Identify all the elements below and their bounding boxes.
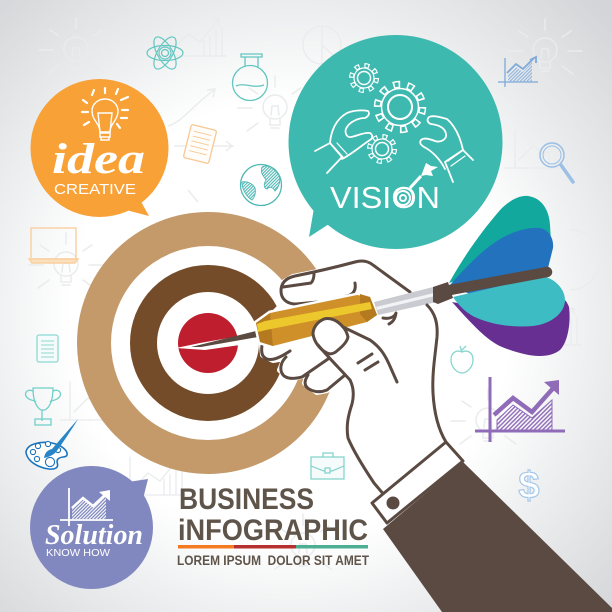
icon: blue chart [498, 57, 538, 87]
icon: palette and brush [26, 419, 78, 469]
cyan flight [453, 276, 565, 327]
icon: atom [147, 34, 183, 72]
blue flight [450, 228, 553, 303]
icon: right hand [420, 116, 473, 182]
icon: trophy [26, 388, 60, 425]
title line 2: iNFOGRAPHIC [178, 514, 368, 547]
target [94, 229, 322, 457]
icon: magnifier [540, 143, 573, 182]
icon: briefcase [311, 453, 344, 479]
subtitle: LOREM IPSUM DOLOR SIT AMET [177, 553, 370, 568]
grip halo [256, 295, 377, 346]
panel: idea bubble [30, 79, 168, 217]
shaft highlight [376, 293, 435, 310]
palm outline [347, 380, 385, 496]
outer ring [94, 229, 322, 457]
thumb [313, 318, 348, 354]
icon: gears [352, 66, 422, 162]
cuff button [386, 496, 400, 510]
icon: light bulb [82, 88, 128, 140]
ring finger [281, 357, 328, 378]
thumb lower edge [343, 327, 397, 382]
tricolour rule [178, 545, 368, 548]
icon: purple chart [475, 377, 565, 442]
shaft [374, 287, 437, 315]
hand back fingers [262, 261, 410, 392]
icon: vision target and dart [396, 163, 438, 205]
dart flights [449, 196, 570, 356]
knuckle lines [358, 354, 378, 370]
jacket sleeve [383, 462, 612, 612]
icon: apple [451, 346, 473, 373]
grip facets [256, 294, 377, 346]
crease behind grip [383, 313, 396, 324]
creative label: CREATIVE [54, 181, 136, 198]
know how label: KNOW HOW [46, 548, 111, 559]
slit in bullseye [176, 336, 240, 350]
icon: document [183, 124, 217, 164]
idea bubble shape [30, 79, 168, 217]
needle [191, 331, 258, 347]
little finger [305, 375, 345, 392]
hand front [313, 305, 446, 496]
grip [256, 295, 377, 346]
index finger [281, 261, 410, 304]
vision bubble shape [288, 35, 502, 249]
purple flight [452, 296, 570, 356]
middle finger [262, 345, 290, 360]
cuff [372, 442, 463, 523]
icon: growth chart [60, 488, 113, 526]
dart [191, 272, 547, 347]
middle ring [144, 278, 272, 408]
vision label: VISION [330, 181, 440, 215]
title block [177, 483, 370, 568]
icon: notes [37, 335, 58, 362]
title line 1: BUSINESS [179, 483, 314, 516]
icon: laptop [29, 228, 78, 263]
panel: vision bubble [288, 35, 502, 249]
idea script: idea [52, 136, 145, 183]
icon: left hand [315, 110, 372, 173]
grip stripe [257, 302, 372, 332]
finger crease [340, 283, 355, 298]
thumb inner edge [318, 345, 350, 380]
hand silhouette [258, 261, 446, 503]
collar [433, 282, 453, 304]
fingernail [283, 274, 314, 287]
sleeve [372, 442, 612, 612]
panel: solution bubble [30, 466, 153, 589]
icon: globe [240, 164, 282, 206]
stem [450, 272, 547, 290]
teal green flight [449, 196, 551, 283]
icon: dollar: $ [518, 465, 540, 507]
solution script: Solution [45, 520, 143, 551]
bullseye [178, 313, 238, 373]
back of hand outline [427, 305, 446, 442]
solution bubble shape [30, 466, 153, 589]
icon: flask [232, 54, 268, 100]
